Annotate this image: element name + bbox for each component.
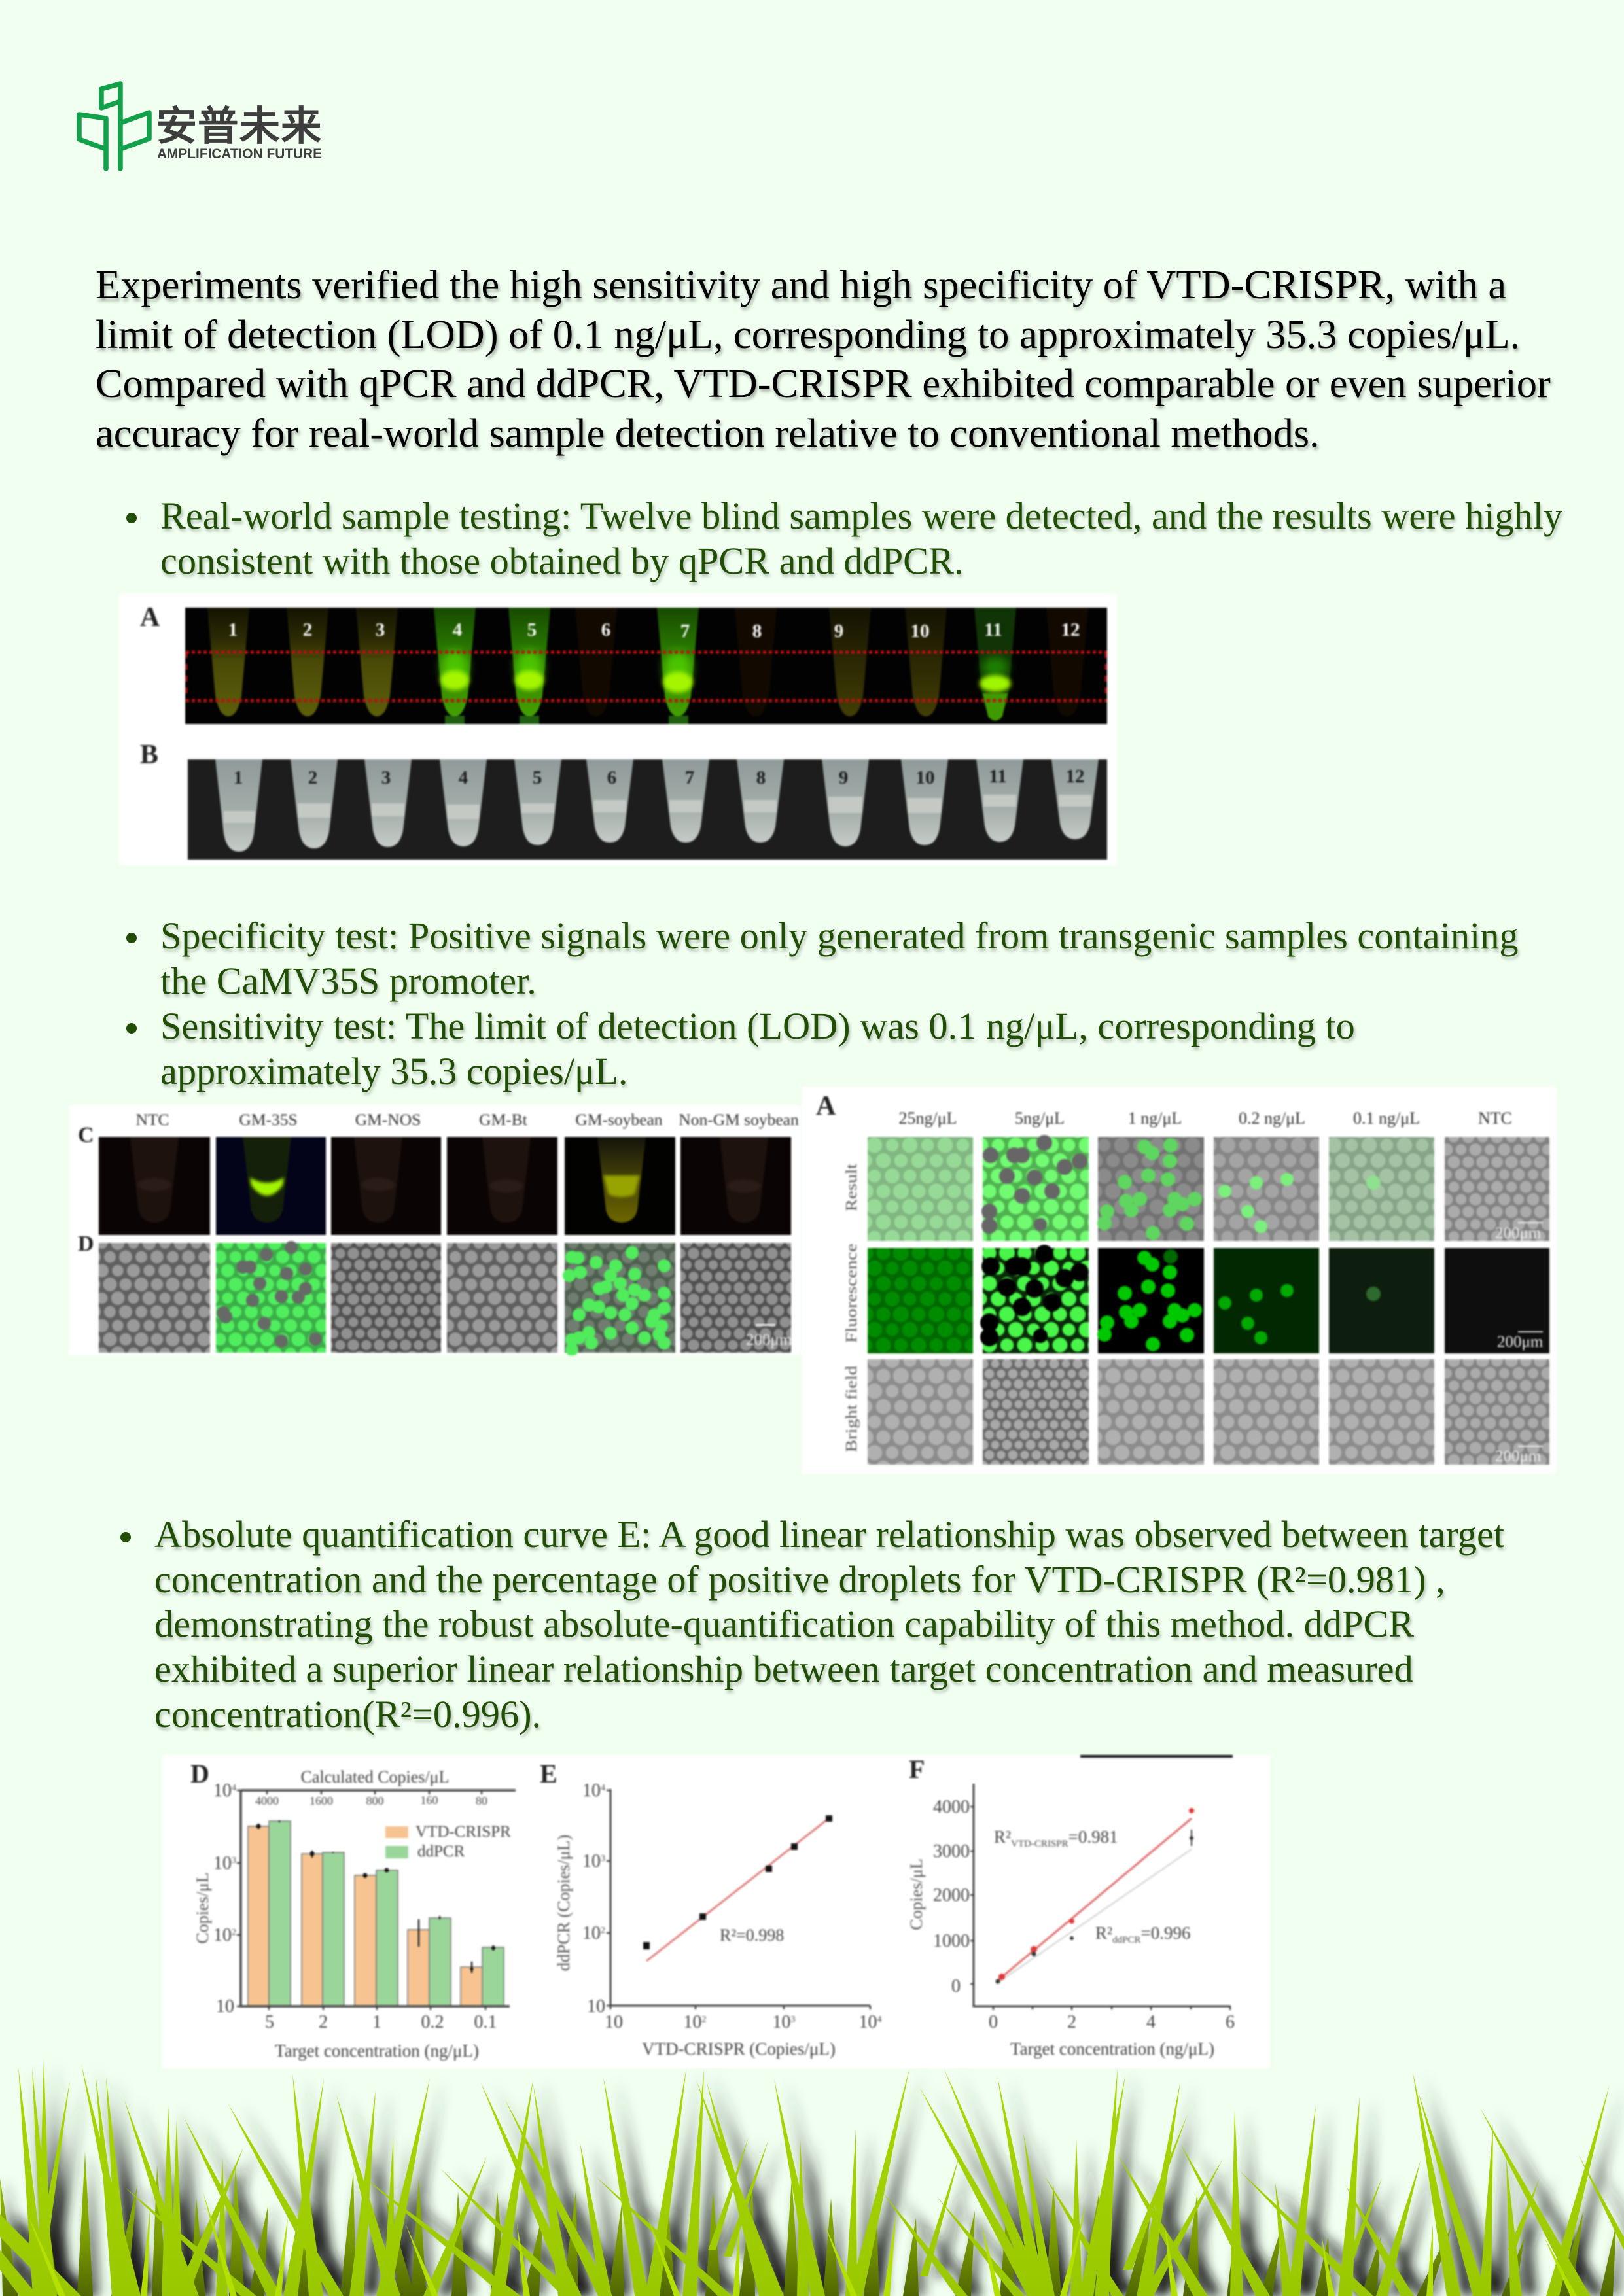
chart E: ddPCR vs VTD-CRISPR scatter: ddPCR (Copies/μL) [554,1835,573,1971]
figure panel: quantification charts D, E, F [162,1754,1270,2069]
chart E: ddPCR vs VTD-CRISPR scatter: E [540,1759,557,1788]
bullet: real-world sample testing [126,495,1564,586]
chart E: ddPCR vs VTD-CRISPR scatter: 2 [701,2015,707,2025]
chart F: standard curves: 2 [1067,2012,1076,2032]
strip A: fluorescence tubes: 10 [911,621,929,642]
chart E: ddPCR vs VTD-CRISPR scatter: 10 [582,1923,601,1943]
panel letter A: A [816,1091,836,1121]
chart F: standard curves: VTD-CRISPR [1011,1839,1068,1849]
chart F: standard curves [907,1754,1235,2059]
row labels: Result [843,1164,860,1211]
chart E: ddPCR vs VTD-CRISPR scatter: 10 [582,1851,601,1871]
chart F: standard curves: Target concentration (ng/μL) [1010,2039,1214,2059]
chart F: standard curves: R² [1095,1923,1112,1943]
logo wordmark: AMPLIFICATION FUTURE [157,147,322,162]
chart D: copies bar chart: 160 [420,1794,438,1807]
figure panel: specificity tubes and droplets C, D [69,1105,801,1357]
bullet: sensitivity test: Sensitivity test: The limit of detection (LOD) was 0.1 ng/μL, corresponding to [160,1005,1355,1047]
row letters C and D: D [78,1232,94,1256]
strip A: fluorescence tubes: 8 [752,621,762,642]
row: fluorescence [868,1245,1549,1353]
strip B: bright-field tubes: 3 [381,767,391,788]
strip A: fluorescence tubes: 7 [680,621,690,642]
chart F: standard curves: R² [994,1827,1011,1847]
bullet: specificity test [126,914,1521,1006]
column labels: 25ng/μL [898,1109,957,1128]
chart D: copies bar chart [190,1759,516,2061]
logo mark: leaf sprout [79,84,149,169]
row letters C and D [78,1123,94,1256]
intro paragraph: accuracy for real-world sample detection relative to conventional methods. [96,410,1320,456]
chart D: copies bar chart: 2 [319,2012,328,2032]
bullet: absolute quantification curve: Absolute quantification curve E: A good linear relationship was observed between target [154,1513,1504,1556]
chart F: standard curves: 2000 [933,1885,970,1905]
chart D: copies bar chart: 0.1 [474,2012,497,2032]
column labels: GM-soybean [575,1110,663,1129]
chart E: ddPCR vs VTD-CRISPR scatter: 3 [790,2015,796,2025]
column labels [898,1109,1512,1128]
figure panel: tube strips A and B [119,593,1117,865]
chart D: copies bar chart: Calculated Copies/μL [301,1767,449,1786]
strip B: bright-field tubes: 1 [234,767,243,788]
column labels: NTC [1478,1109,1512,1128]
intro paragraph [96,262,1553,461]
row C: tube photos [99,1137,791,1235]
chart D: copies bar chart: 2 [232,1928,236,1938]
chart D: copies bar chart: 1600 [309,1794,333,1807]
strip B: bright-field tubes: 6 [607,767,616,788]
legend: VTD-CRISPR [415,1823,511,1841]
chart E: ddPCR vs VTD-CRISPR scatter: 4 [601,1783,605,1793]
chart D: copies bar chart: 80 [476,1794,487,1807]
chart D: copies bar chart: Target concentration (ng/μL) [275,2041,479,2061]
chart F: standard curves: F [909,1755,925,1784]
column labels: NTC [136,1110,169,1129]
column labels: 0.2 ng/μL [1239,1109,1305,1128]
chart F: standard curves: 1000 [933,1931,970,1951]
chart E: ddPCR vs VTD-CRISPR scatter: VTD-CRISPR (Copies/μL) [642,2039,836,2059]
chart E: ddPCR vs VTD-CRISPR scatter: 3 [601,1854,605,1864]
chart D: copies bar chart: 10 [216,1996,234,2017]
strip A: fluorescence tubes: 3 [376,619,385,640]
strip A: fluorescence tubes: 12 [1061,619,1080,640]
chart F: standard curves: =0.996 [1140,1923,1190,1943]
chart F: standard curves: 0 [951,1976,961,1996]
column labels: Non-GM soybean [679,1110,799,1129]
column labels: GM-Bt [479,1110,527,1129]
chart D: copies bar chart: Copies/μL [193,1872,212,1944]
bullet: sensitivity test [126,1005,1356,1096]
chart E: ddPCR vs VTD-CRISPR scatter [540,1759,882,2059]
intro paragraph: Experiments verified the high sensitivity and high specificity of VTD-CRISPR, with a [96,262,1506,307]
strip B: bright-field tubes: 5 [533,767,542,788]
grass background [0,2059,1624,2296]
strip A: fluorescence tubes: 11 [984,619,1002,640]
strip A: fluorescence tubes: 9 [834,621,843,642]
bullet: absolute quantification curve: demonstrating the robust absolute-quantification capability of this method. ddPCR [154,1603,1414,1645]
panel letter A: A [140,602,160,633]
strip A: fluorescence tubes: 6 [601,619,610,640]
chart D: copies bar chart: 0.2 [421,2012,444,2032]
chart D: copies bar chart: 4 [232,1783,236,1793]
chart E: ddPCR vs VTD-CRISPR scatter: 10 [605,2012,623,2032]
column labels: GM-35S [239,1110,298,1129]
bullet: absolute quantification curve [120,1513,1506,1738]
row labels [843,1164,860,1452]
chart E: ddPCR vs VTD-CRISPR scatter: 10 [683,2012,701,2032]
chart D: copies bar chart: 800 [366,1794,383,1807]
chart D: copies bar chart: 10 [213,1853,232,1873]
panel letter B: B [140,740,158,770]
chart F: standard curves: 4000 [933,1797,970,1817]
chart D: copies bar chart: D [190,1759,209,1788]
strip B: bright-field tubes: 9 [839,767,848,788]
strip B: bright-field tubes: 8 [756,767,766,788]
legend [385,1823,511,1860]
bullet: real-world sample testing: consistent with those obtained by qPCR and ddPCR. [160,540,963,582]
row: bright field [868,1359,1549,1465]
bullet: sensitivity test: approximately 35.3 copies/μL. [160,1050,627,1092]
column labels: 0.1 ng/μL [1353,1109,1420,1128]
strip A: fluorescence tubes: 4 [453,619,462,640]
chart F: standard curves: Copies/μL [907,1858,926,1930]
scale bar 200 μm: 200μm [746,1331,792,1349]
chart D: copies bar chart: 10 [213,1781,232,1801]
strip B: bright-field tubes [188,759,1107,860]
strip A: fluorescence tubes: 1 [228,619,238,640]
bullet: specificity test: the CaMV35S promoter. [160,960,537,1002]
chart E: ddPCR vs VTD-CRISPR scatter: 2 [601,1926,605,1936]
strip B: bright-field tubes: 10 [916,767,934,788]
column labels: GM-NOS [355,1110,421,1129]
chart E: ddPCR vs VTD-CRISPR scatter: 10 [582,1781,601,1801]
chart E: ddPCR vs VTD-CRISPR scatter: 4 [877,2015,882,2025]
column labels [136,1110,799,1129]
chart D: copies bar chart: 4000 [255,1794,279,1807]
chart E: ddPCR vs VTD-CRISPR scatter: 10 [587,1996,605,2017]
chart E: ddPCR vs VTD-CRISPR scatter: R²=0.998 [720,1926,784,1945]
bullet: real-world sample testing: Real-world sample testing: Twelve blind samples were detected, and the results were highly [160,495,1562,537]
intro paragraph: Compared with qPCR and ddPCR, VTD-CRISPR exhibited comparable or even superior [96,360,1551,406]
chart F: standard curves: ddPCR [1112,1935,1140,1945]
logo wordmark: 安普未来 [156,93,322,152]
chart F: standard curves: 4 [1146,2012,1156,2032]
intro paragraph: limit of detection (LOD) of 0.1 ng/μL, corresponding to approximately 35.3 copies/μL. [96,311,1520,357]
column labels: 1 ng/μL [1128,1109,1182,1128]
chart E: ddPCR vs VTD-CRISPR scatter: 10 [772,2012,790,2032]
chart F: standard curves: 0 [989,2012,998,2032]
chart D: copies bar chart: 5 [265,2012,274,2032]
row labels: Fluorescence [843,1244,860,1343]
chart D: copies bar chart: 3 [232,1856,236,1866]
logo [77,81,322,171]
row: result [868,1135,1549,1242]
chart F: standard curves: 3000 [933,1841,970,1862]
chart F: standard curves: =0.981 [1068,1827,1118,1847]
row: bright field: 200μm [1495,1448,1542,1465]
chart F: standard curves: 6 [1226,2012,1235,2032]
row: fluorescence: 200μm [1497,1333,1544,1351]
strip B: bright-field tubes: 2 [308,767,317,788]
strip B: bright-field tubes: 12 [1065,766,1085,787]
chart D: copies bar chart: 10 [213,1925,232,1945]
chart D: copies bar chart: 1 [372,2012,381,2032]
row labels: Bright field [843,1366,860,1452]
strip A: fluorescence tubes: 2 [303,619,312,640]
strip B: bright-field tubes: 4 [459,767,468,788]
row: result: 200μm [1495,1225,1542,1242]
bullet: absolute quantification curve: concentration(R²=0.996). [154,1693,541,1735]
bullet: specificity test: Specificity test: Positive signals were only generated from transgenic samples containing [160,914,1518,957]
strip A: fluorescence tubes: 5 [527,619,537,640]
column labels: 5ng/μL [1015,1109,1065,1128]
strip B: bright-field tubes: 7 [685,767,694,788]
chart E: ddPCR vs VTD-CRISPR scatter: 10 [858,2012,877,2032]
strip B: bright-field tubes: 11 [989,766,1007,787]
legend: ddPCR [417,1843,465,1860]
row letters C and D: C [78,1123,94,1147]
strip A: fluorescence tubes [185,608,1107,724]
figure panel: sensitivity droplets A [802,1087,1556,1474]
row D: droplet images [99,1241,791,1356]
bullet: absolute quantification curve: concentration and the percentage of positive droplets for VTD-CRISPR (R²=0.981) , [154,1558,1445,1601]
bullet: absolute quantification curve: exhibited a superior linear relationship between target concentration and measured [154,1648,1413,1690]
